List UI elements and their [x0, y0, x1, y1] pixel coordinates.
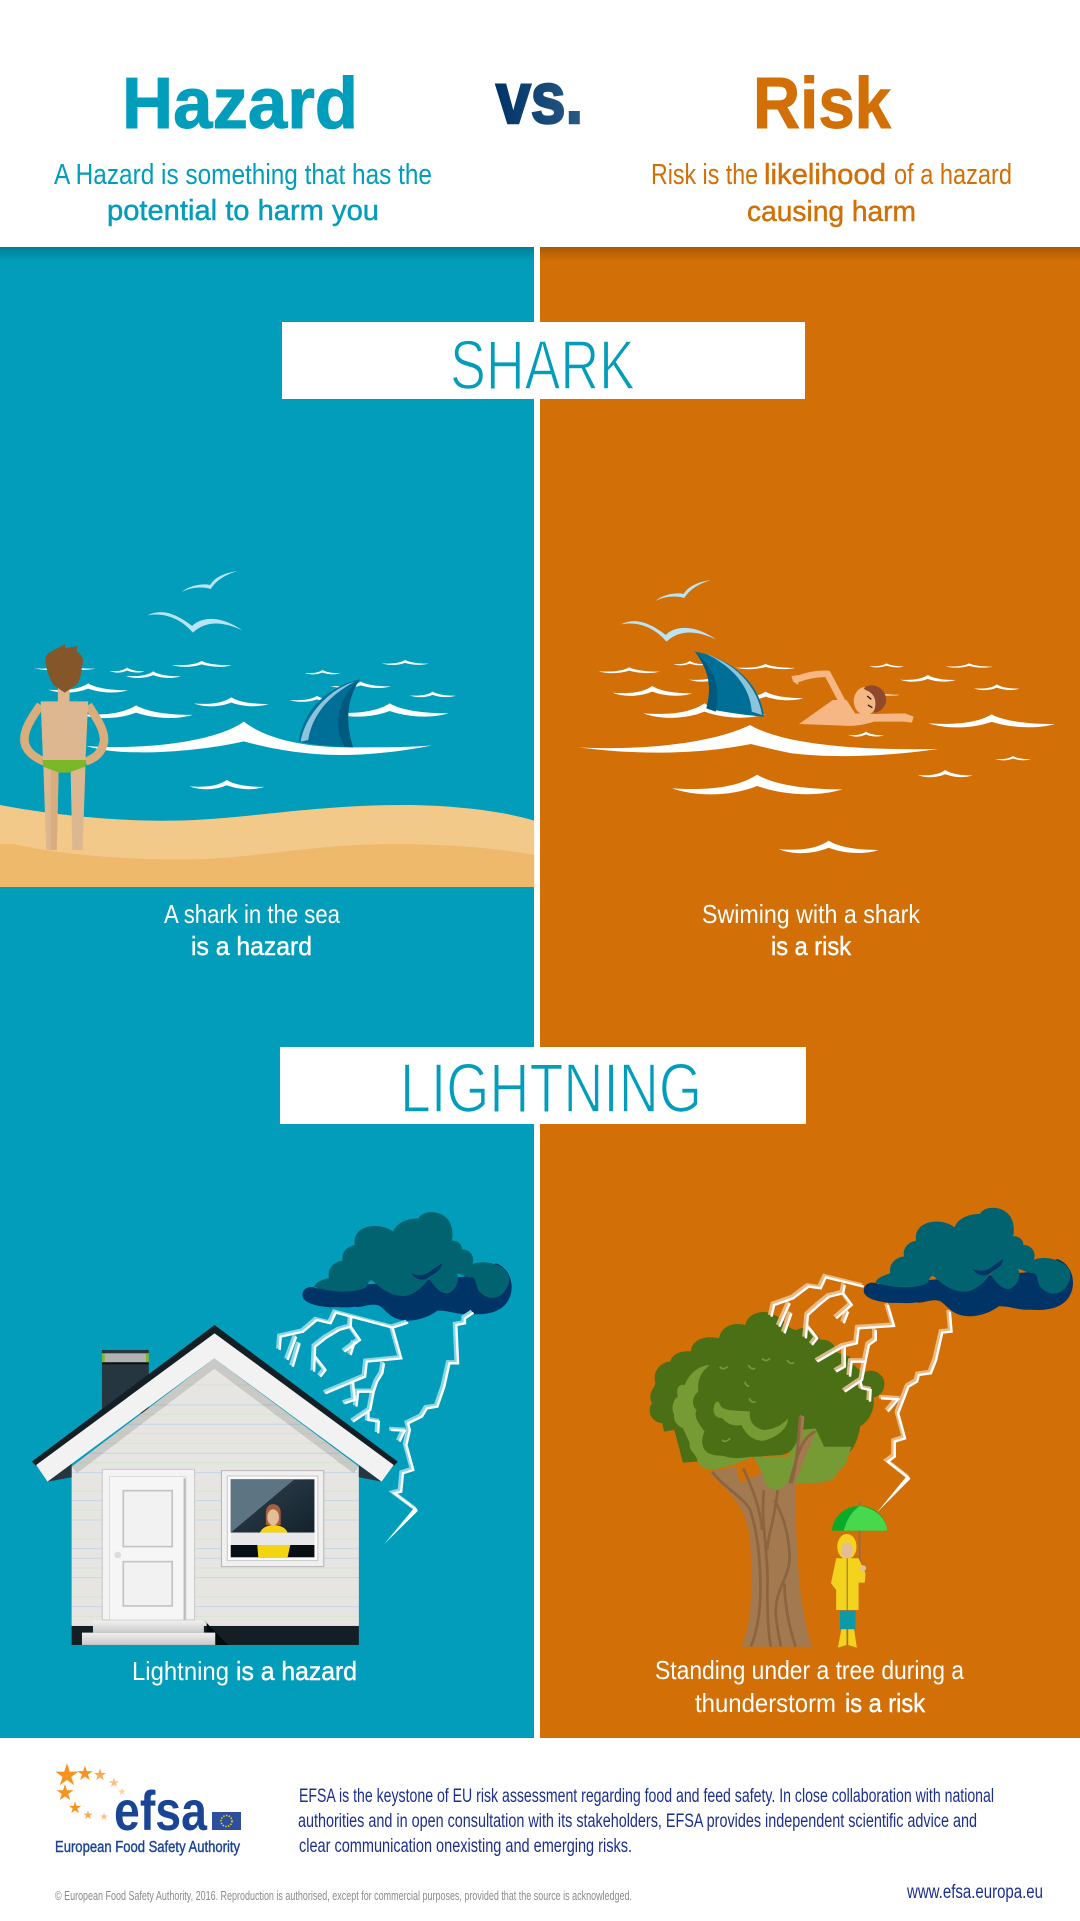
- illustration: house with storm: [32, 1212, 512, 1645]
- text: hazard definition: potential to harm you: [107, 195, 379, 227]
- caption: risk lightning: is a risk: [845, 1688, 926, 1718]
- title: Risk: Risk: [753, 64, 892, 144]
- text: risk definition: likelihood: [764, 159, 886, 191]
- swimmer: [791, 674, 914, 726]
- sand: [0, 805, 534, 887]
- heading box: LIGHTNING: LIGHTNING: [400, 1049, 702, 1127]
- lightning bolts: [770, 1276, 952, 1513]
- waves: [34, 660, 456, 789]
- logo stars: ★: [83, 1808, 93, 1822]
- illustration: hazard shark scene: [0, 571, 534, 887]
- caption: risk lightning: thunderstorm: [695, 1688, 836, 1718]
- logo stars: ★: [76, 1763, 94, 1785]
- roof: [32, 1325, 398, 1482]
- title: vs.: vs.: [496, 59, 583, 139]
- caption: hazard lightning: Lightning: [132, 1656, 229, 1686]
- logo stars: ★: [54, 1759, 80, 1792]
- text: risk definition: causing harm: [747, 196, 916, 228]
- footer text: about EFSA: clear communication onexisting and emerging risks.: [299, 1836, 632, 1857]
- house wall: [69, 1358, 362, 1645]
- caption: hazard shark: A shark in the sea: [164, 899, 340, 929]
- text: risk definition: of a hazard: [894, 159, 1012, 191]
- caption: hazard lightning: [132, 1656, 357, 1686]
- footer logo: EFSA: European Food Safety Authority: [55, 1839, 240, 1856]
- heading box: SHARK: [282, 322, 805, 404]
- caption: hazard shark: is a hazard: [191, 931, 312, 961]
- person in raincoat: [831, 1534, 866, 1648]
- logo stars: ★: [55, 1780, 75, 1805]
- footer text: about EFSA: [298, 1786, 994, 1857]
- storm cloud: [864, 1208, 1073, 1316]
- panel: risk background: [540, 247, 1080, 1738]
- footer logo: EFSA: efsa: [114, 1779, 208, 1842]
- illustration: risk shark scene: [579, 580, 1055, 853]
- text: risk definition: Risk is the: [651, 159, 758, 191]
- chimney: [102, 1350, 149, 1413]
- caption: risk lightning: [655, 1655, 964, 1718]
- storm cloud: [302, 1212, 512, 1321]
- divider gap: [534, 247, 540, 1738]
- caption: risk shark: [702, 899, 921, 961]
- umbrella: [832, 1502, 887, 1567]
- lightning bolts: [278, 1311, 474, 1544]
- window with person: [221, 1471, 324, 1567]
- waves: [579, 661, 1055, 853]
- steps: [82, 1620, 228, 1645]
- caption: hazard lightning: is a hazard: [236, 1656, 357, 1686]
- footer: copyright: © European Food Safety Authority, 2016. Reproduction is authorised, except for commercial purposes, provided that the source is acknowledged.: [55, 1889, 632, 1903]
- text: risk definition: [651, 159, 1012, 228]
- heading box: SHARK: SHARK: [450, 326, 635, 404]
- tree trunk: [709, 1415, 816, 1647]
- title: Hazard: Hazard: [122, 64, 358, 144]
- shark fin: [299, 679, 360, 747]
- caption: risk shark: Swiming with a shark: [702, 899, 921, 929]
- tree crown: [650, 1312, 884, 1489]
- logo stars: ★: [100, 1812, 109, 1823]
- person on beach: [24, 644, 104, 850]
- shark fin: [695, 652, 764, 717]
- footer logo: EFSA: [54, 1759, 241, 1856]
- logo stars: ★: [118, 1787, 127, 1798]
- text: hazard definition: [54, 159, 432, 227]
- caption: hazard shark: [164, 899, 340, 961]
- header shadow: [0, 247, 1080, 261]
- logo stars: ★: [108, 1775, 120, 1790]
- text: hazard definition: A Hazard is something that has the: [54, 159, 432, 191]
- footer: website: www.efsa.europa.eu: [906, 1882, 1043, 1903]
- logo stars: ★: [93, 1767, 107, 1784]
- birds: [147, 571, 243, 633]
- door: [102, 1469, 195, 1620]
- caption: risk shark: is a risk: [771, 931, 852, 961]
- logo stars: ★: [68, 1800, 82, 1817]
- illustration: tree, person and storm: [650, 1208, 1073, 1648]
- logo stars: [54, 1759, 127, 1823]
- caption: risk lightning: Standing under a tree during a: [655, 1655, 964, 1685]
- EU flag: [212, 1812, 241, 1830]
- panel: hazard background: [0, 247, 534, 1738]
- birds: [621, 580, 716, 642]
